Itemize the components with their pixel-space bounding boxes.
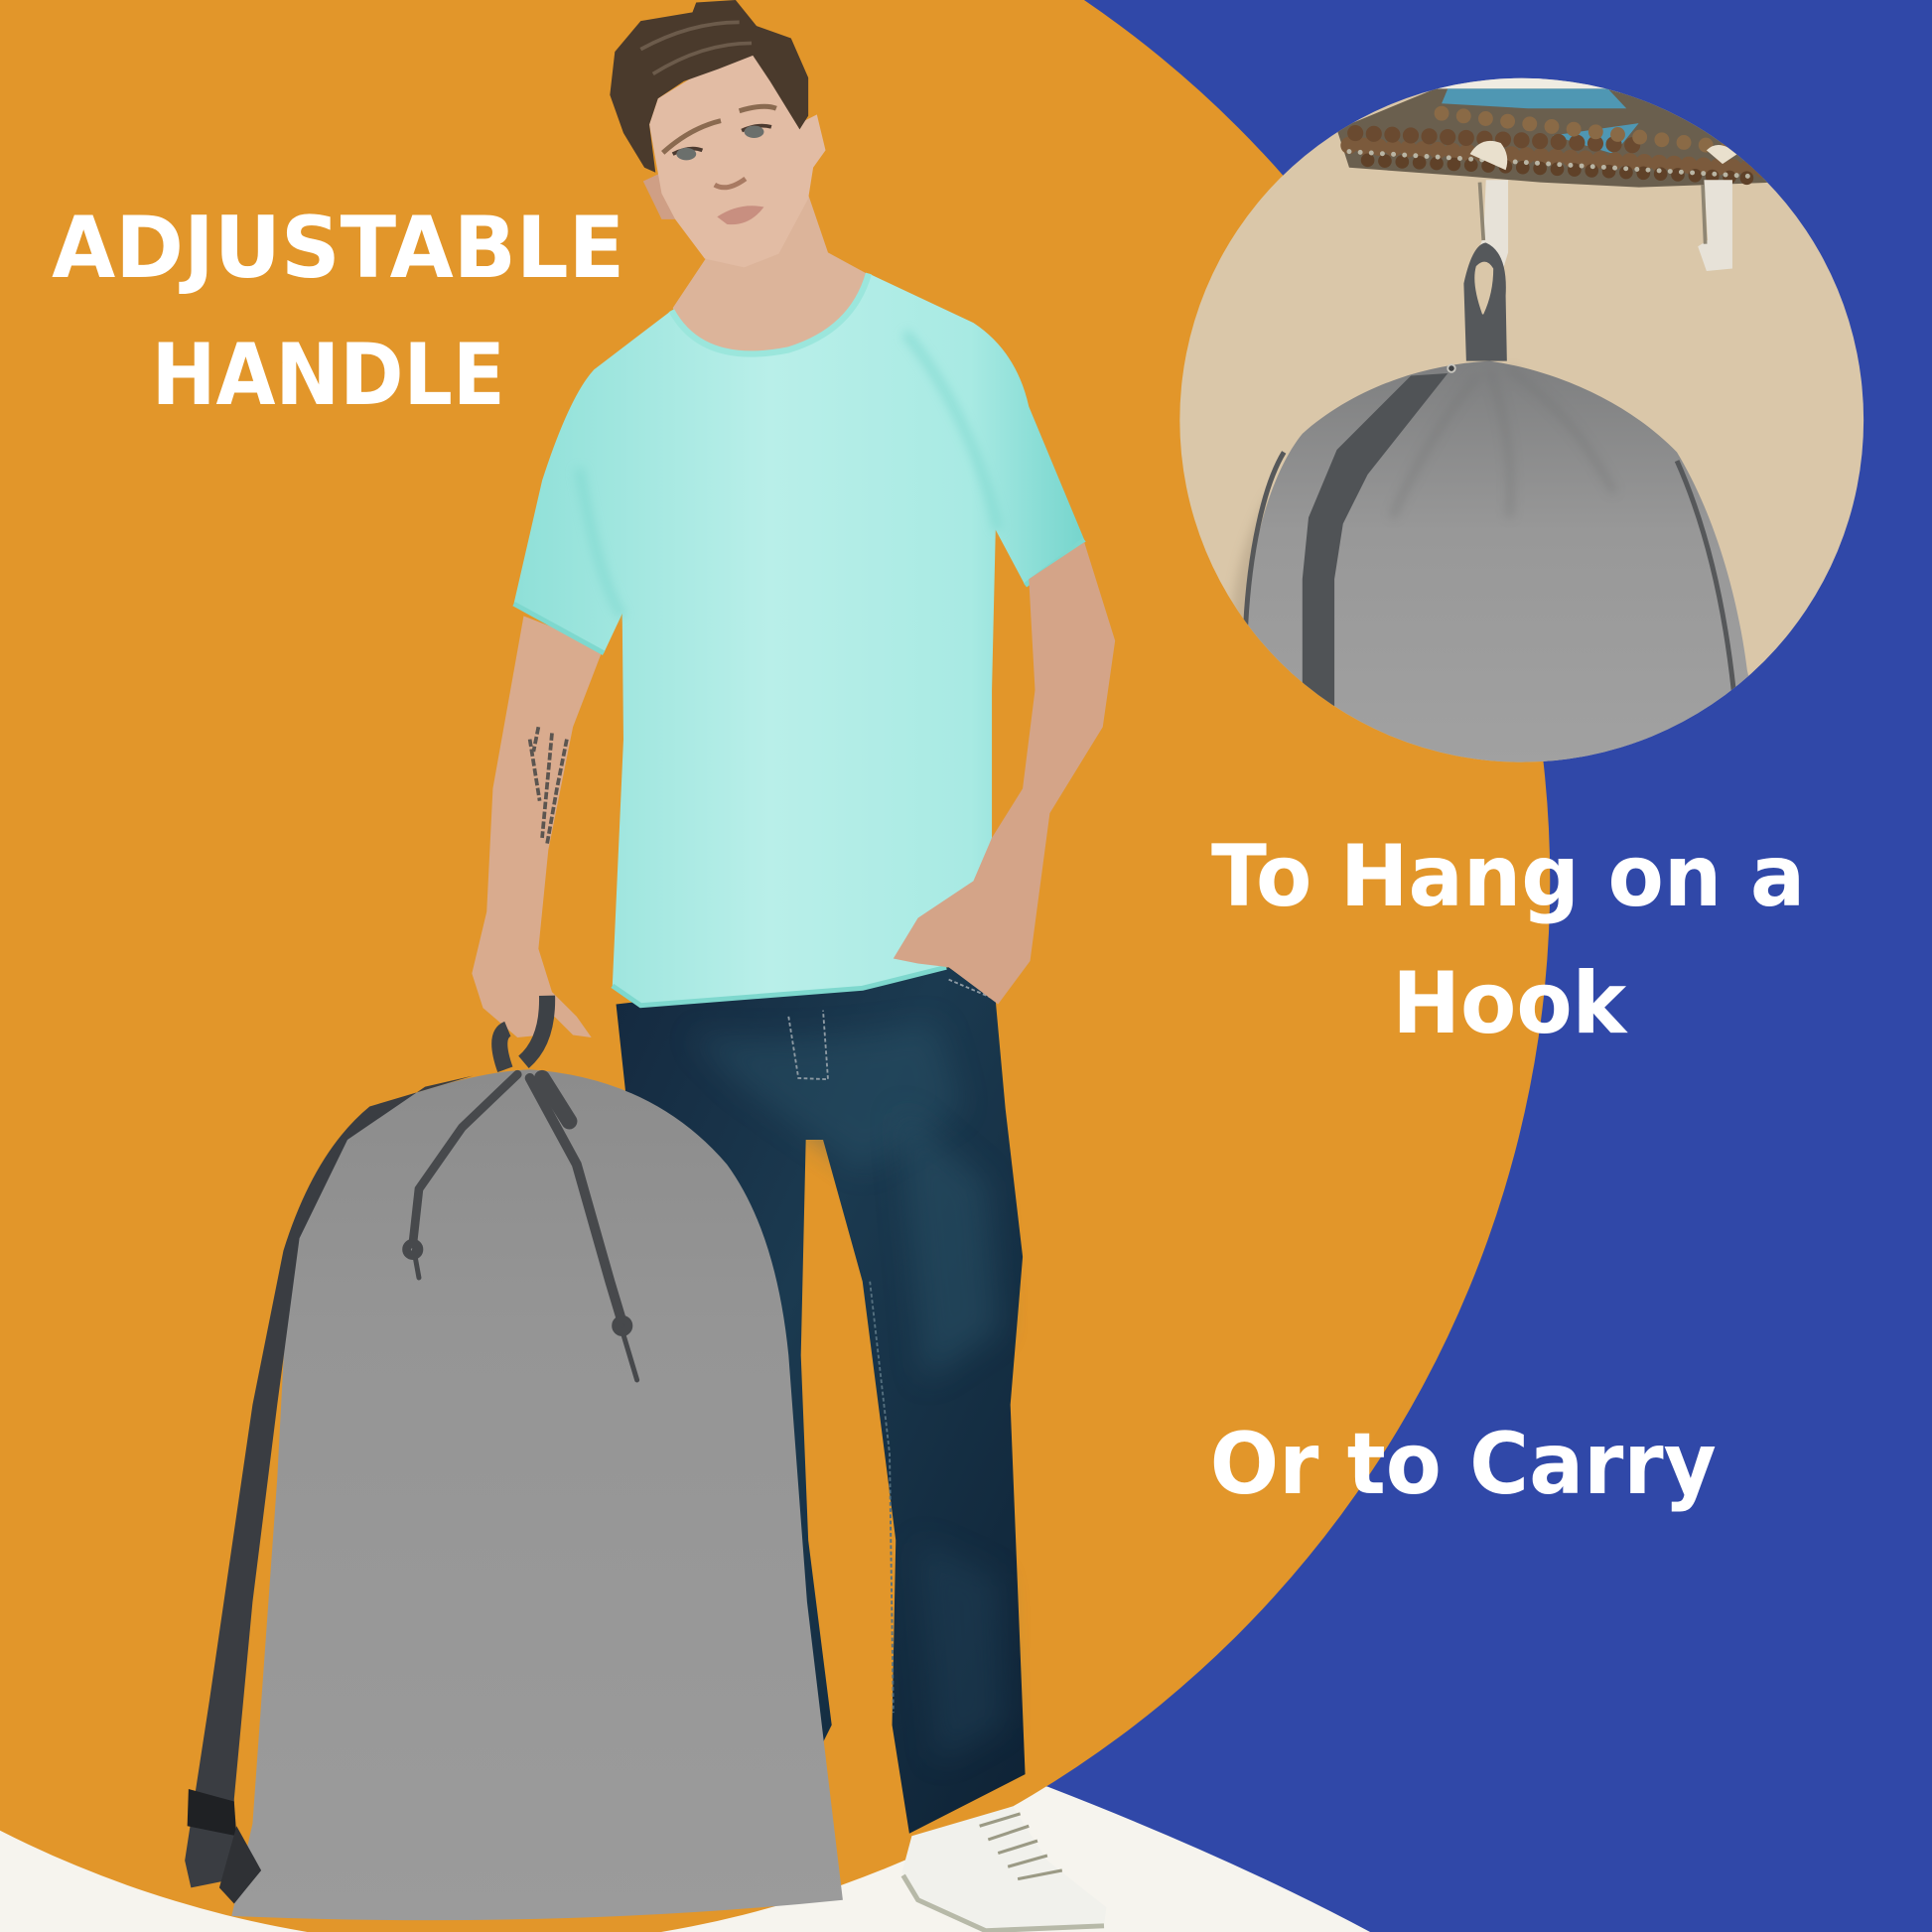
arm tattoo — [530, 727, 567, 844]
door hooks — [1477, 180, 1732, 271]
callout: to hang on a hook: To Hang on a — [1211, 828, 1805, 926]
bag folds — [1397, 508, 1511, 509]
callout: or to carry: Or to Carry — [1210, 1416, 1717, 1514]
framed seashell art — [1337, 73, 1774, 188]
man figure — [472, 0, 1115, 1932]
t-shirt — [514, 274, 1084, 1006]
arm with hand — [472, 617, 604, 1037]
shoe — [901, 1806, 1106, 1932]
grommet — [1448, 364, 1455, 372]
bag strap loop — [1463, 242, 1507, 361]
heading: adjustable handle: ADJUSTABLE — [52, 200, 624, 298]
bag piping — [1246, 452, 1733, 690]
shoulder strap — [185, 1075, 474, 1887]
heading: adjustable handle — [52, 200, 624, 425]
bag strap in inset — [1303, 373, 1448, 740]
laundry bag held by man — [185, 996, 843, 1920]
bag body — [231, 1069, 843, 1920]
far leg and jeans — [617, 967, 1026, 1834]
background: white floor — [0, 1787, 1370, 1932]
inset photo: bag on a hook — [1179, 73, 1864, 788]
heading: adjustable handle: HANDLE — [152, 327, 505, 425]
callout: to hang on a hook — [1211, 828, 1805, 1053]
wall shadow — [1231, 499, 1285, 667]
head — [610, 0, 826, 267]
callout: to hang on a hook: Hook — [1392, 955, 1628, 1053]
neck — [673, 195, 871, 369]
arm in pocket — [894, 542, 1115, 1004]
bag dome — [1246, 361, 1748, 762]
strap corner tab — [219, 1826, 261, 1903]
bag handle loop — [499, 996, 547, 1069]
beige wall — [1179, 77, 1864, 762]
drawstring cord — [407, 1074, 637, 1380]
strap buckle — [188, 1789, 236, 1836]
